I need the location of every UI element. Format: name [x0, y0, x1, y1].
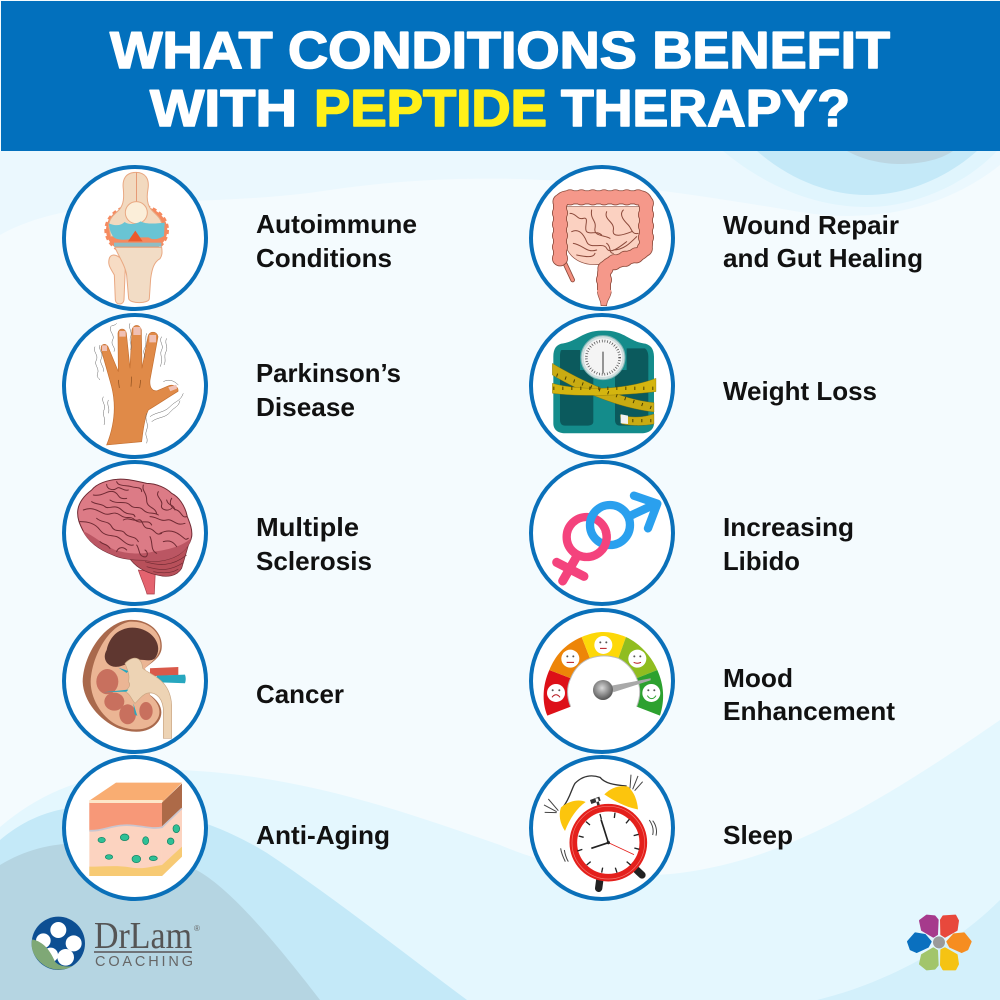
label: wound repair and gut healing: and Gut Healing: [723, 243, 923, 273]
logo: DrLam Coaching: ®: [194, 924, 200, 933]
label: weight loss: Weight Loss: [723, 376, 877, 406]
title: PEPTIDE: [314, 80, 547, 138]
logo: DrLam Coaching: COACHING: [95, 954, 193, 970]
title: THERAPY?: [561, 80, 850, 138]
panel: cancer: [64, 610, 206, 752]
label: multiple sclerosis: [256, 512, 372, 576]
icon: brain: [78, 479, 192, 594]
panel: multiple sclerosis: [64, 462, 206, 604]
panel: parkinson's disease: [64, 315, 206, 457]
logo: DrLam Coaching: [32, 915, 200, 970]
panel: increasing libido: [531, 462, 673, 604]
label: mood enhancement: Enhancement: [723, 696, 895, 726]
icon: alarm clock: [544, 775, 656, 888]
label: mood enhancement: Mood: [723, 663, 793, 693]
title: WITH: [150, 80, 297, 138]
header banner: [1, 1, 1000, 151]
label: parkinson's disease: Disease: [256, 392, 355, 422]
label: autoimmune conditions: [256, 209, 417, 273]
label: autoimmune conditions: Conditions: [256, 243, 392, 273]
title: [110, 22, 890, 138]
icon: gender symbols: [557, 496, 657, 581]
panel: sleep: [531, 757, 673, 899]
icon: rainbow flower: [908, 916, 971, 969]
icon: DrLam flower: [32, 917, 85, 970]
icon: mood gauge: [544, 632, 663, 716]
logo: DrLam Coaching: DrLam: [94, 915, 192, 957]
panel: anti-aging: [64, 757, 206, 899]
label: increasing libido: Libido: [723, 546, 800, 576]
icon: skin cube: [89, 783, 182, 876]
panel: wound repair and gut healing: [531, 167, 673, 309]
label: increasing libido: [723, 512, 854, 576]
label: anti-aging: Anti-Aging: [256, 820, 390, 850]
label: multiple sclerosis: Sclerosis: [256, 546, 372, 576]
label: parkinson's disease: [256, 358, 401, 422]
label: parkinson's disease: Parkinson’s: [256, 358, 401, 388]
panel: weight loss: [531, 315, 673, 457]
label: sleep: Sleep: [723, 820, 793, 850]
icon: kidney: [83, 620, 186, 738]
label: cancer: Cancer: [256, 679, 344, 709]
icon: scale with tape measure: [552, 331, 656, 433]
label: multiple sclerosis: Multiple: [256, 512, 359, 542]
label: wound repair and gut healing: [723, 210, 923, 273]
icon: intestines: [560, 197, 646, 306]
title: WHAT CONDITIONS BENEFIT: [110, 22, 890, 80]
panel: autoimmune conditions: [64, 167, 206, 309]
label: mood enhancement: [723, 663, 895, 726]
panel: mood enhancement: [531, 610, 673, 752]
icon: knee joint: [106, 172, 167, 304]
label: wound repair and gut healing: Wound Repair: [723, 210, 899, 240]
label: autoimmune conditions: Autoimmune: [256, 209, 417, 239]
icon: shaking hand: [94, 323, 183, 445]
label: increasing libido: Increasing: [723, 512, 854, 542]
